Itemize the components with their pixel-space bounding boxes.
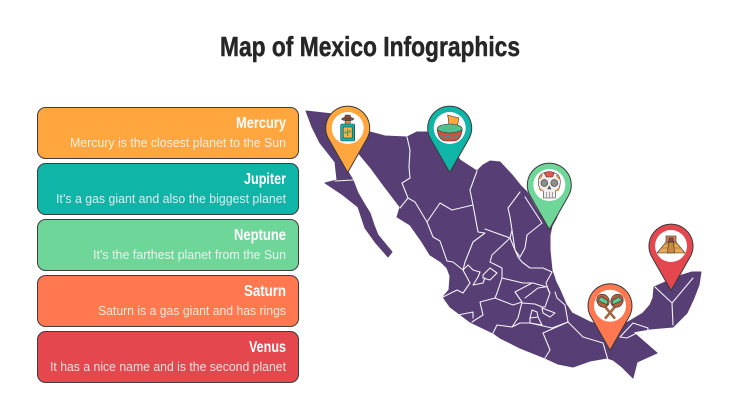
state borders bbox=[335, 137, 693, 360]
icon: tequila bottle bbox=[341, 115, 355, 141]
panel: Neptune bbox=[38, 220, 298, 270]
panel: Jupiter bbox=[38, 164, 298, 214]
pin: guacamole bowl bbox=[428, 106, 472, 172]
pin: maracas bbox=[588, 284, 632, 350]
title: Map of Mexico Infographics bbox=[220, 31, 520, 62]
heading: Saturn: Saturn bbox=[244, 283, 286, 300]
icon: sugar skull bbox=[538, 172, 560, 198]
icon: maracas bbox=[594, 292, 626, 319]
panel: Saturn bbox=[38, 276, 298, 326]
pin: tequila bottle bbox=[326, 106, 370, 172]
icon: guacamole bowl bbox=[437, 115, 462, 141]
pin: sugar skull bbox=[527, 163, 571, 230]
panel: Venus bbox=[38, 332, 298, 382]
heading: Neptune: Neptune bbox=[234, 227, 286, 244]
map of Mexico bbox=[306, 111, 701, 378]
text: Venus description: It has a nice name and is the second planet bbox=[50, 360, 287, 374]
panel: Mercury bbox=[38, 108, 298, 158]
text: Saturn description: Saturn is a gas giant and has rings bbox=[98, 304, 286, 318]
heading: Jupiter: Jupiter bbox=[244, 171, 286, 188]
icon: pyramid bbox=[657, 236, 685, 253]
text: Neptune description: It’s the farthest planet from the Sun bbox=[93, 248, 286, 262]
text: Mercury description: Mercury is the closest planet to the Sun bbox=[70, 136, 286, 150]
pin: pyramid bbox=[649, 224, 693, 290]
text: Jupiter description: It’s a gas giant and also the biggest planet bbox=[56, 192, 287, 206]
heading: Venus: Venus bbox=[249, 339, 286, 356]
heading: Mercury: Mercury bbox=[236, 115, 286, 132]
